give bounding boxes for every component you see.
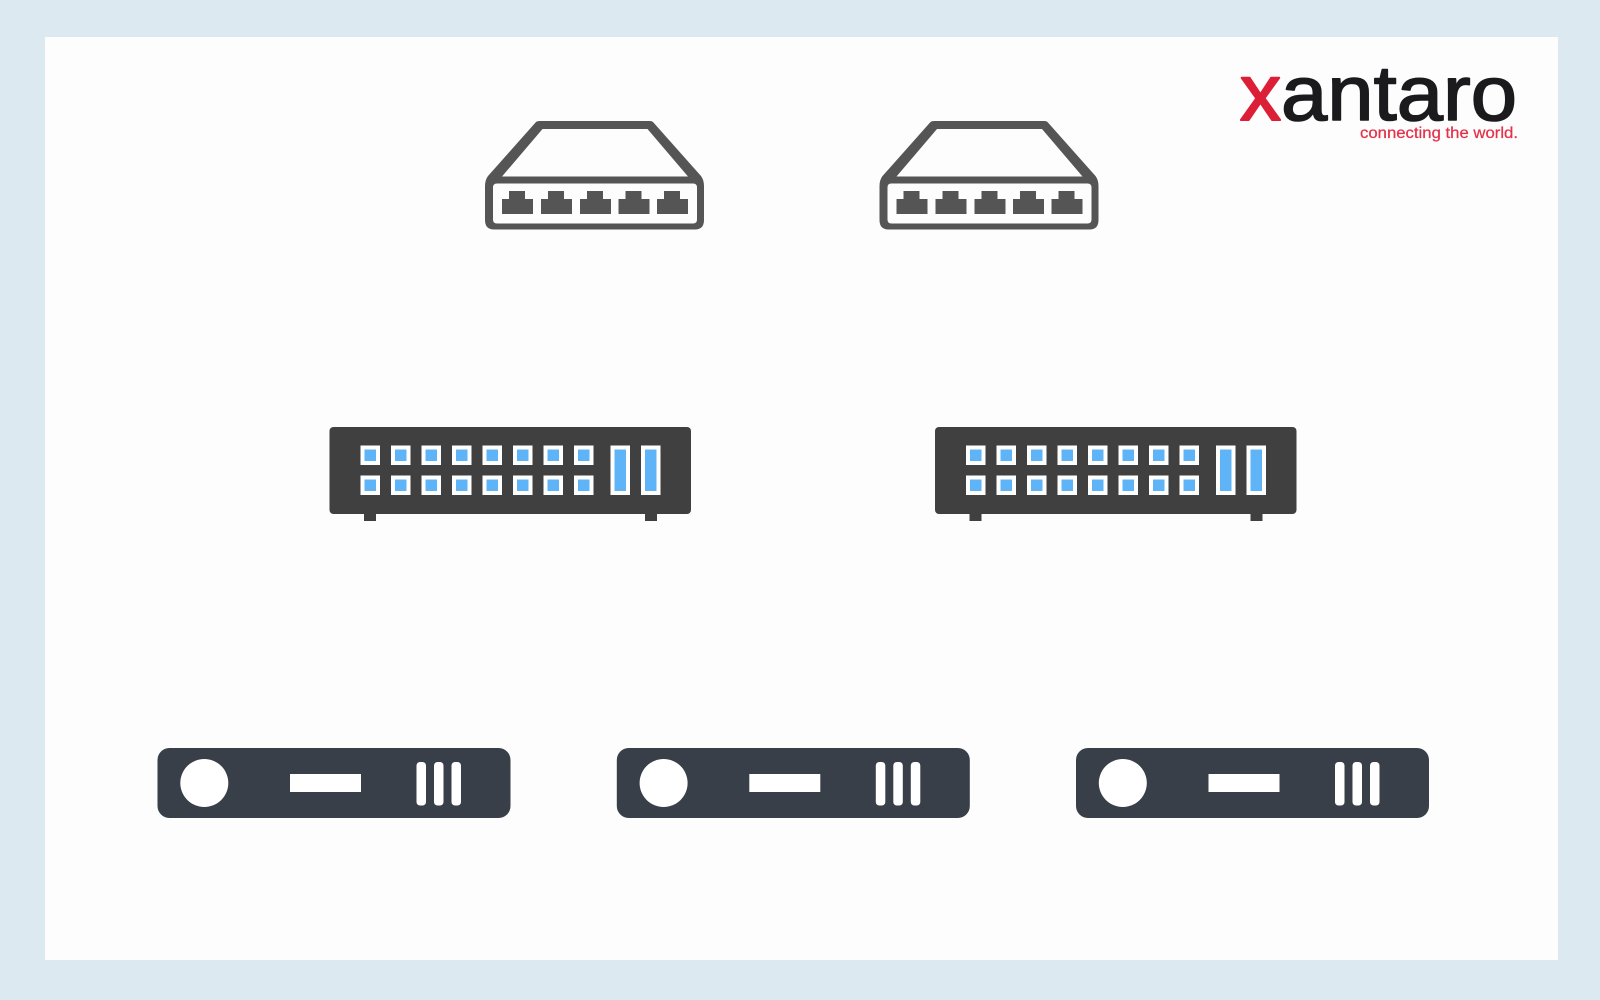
icon: server middle — [617, 748, 970, 818]
logo wordmark: antaro — [1281, 49, 1517, 137]
icon: hub left — [485, 121, 704, 230]
logo tagline: connecting the world. — [1360, 125, 1518, 142]
icon: switch right — [935, 427, 1296, 521]
icon: server right — [1076, 748, 1429, 818]
icon: hub right — [880, 121, 1098, 230]
logo: xantaro — [1240, 48, 1518, 142]
icon: server left — [158, 748, 510, 818]
logo mark: red x: x — [1240, 48, 1281, 137]
icon: switch left — [330, 427, 691, 521]
